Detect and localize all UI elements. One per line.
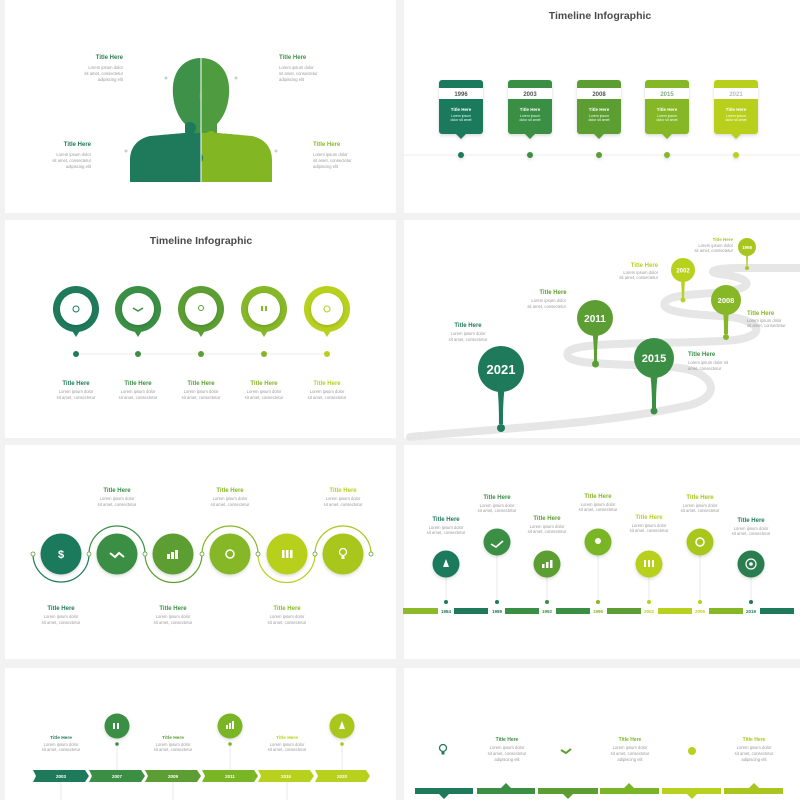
label 1998: Title Here	[713, 237, 733, 242]
label above 2: Title Here	[103, 488, 131, 494]
item 1996	[579, 494, 618, 604]
card 2021	[714, 80, 758, 158]
chevron bar: 2003	[56, 774, 67, 779]
label below 3: Title Here	[159, 606, 187, 612]
label above 6	[324, 488, 363, 507]
ring pin 5: Title Here	[313, 381, 341, 387]
label 2008	[747, 311, 786, 328]
callout bottom-left: sit amet, consectetur	[52, 158, 92, 163]
item 2002: Title Here	[635, 515, 663, 521]
text 2015: Title Here	[276, 735, 298, 741]
callout top-left: adipiscing elit	[98, 77, 124, 82]
label 2008: sit amet, consectetur	[747, 323, 786, 328]
card 1996: dolor sit amet	[450, 118, 472, 122]
card 2008	[577, 80, 621, 158]
callout bottom-right: Title Here	[313, 142, 341, 148]
label below 3: sit amet, consectetur	[154, 620, 193, 625]
item 2019: Title Here	[737, 518, 765, 524]
card 2015: Title Here	[657, 107, 678, 112]
label 2021: sit amet, consectetur	[449, 337, 488, 342]
card 2003: dolor sit amet	[519, 118, 541, 122]
ring pin 2: Lorem ipsum dolor	[121, 389, 156, 394]
pin 2021: 2021	[487, 362, 515, 377]
icon: head	[688, 747, 696, 755]
ring pin 4	[241, 286, 287, 400]
year bar: 2002	[644, 609, 655, 614]
label 2002: Title Here	[631, 263, 659, 269]
label 2021	[449, 323, 488, 342]
label above 4: sit amet, consectetur	[211, 502, 250, 507]
callout top-right: Lorem ipsum dolor	[279, 65, 314, 70]
ring pin 1: sit amet, consectetur	[57, 395, 96, 400]
circle 2	[96, 534, 138, 574]
label 2015: amet, consectetur	[688, 366, 722, 371]
heading: Timeline Infographic	[150, 235, 252, 247]
item 2006	[681, 495, 720, 604]
item 1992	[528, 516, 567, 604]
ring pin 5: sit amet, consectetur	[308, 395, 347, 400]
text 2003: sit amet, consectetur	[42, 747, 81, 752]
callout bottom-left: Title Here	[64, 142, 92, 148]
panel: wave circles timeline	[31, 488, 373, 625]
label below 5	[268, 606, 307, 625]
pin 2011: 2011	[584, 314, 606, 325]
pin 2015: 2015	[642, 353, 666, 365]
pin 2008: 2008	[718, 296, 734, 305]
label 2008: Lorem ipsum dolor	[747, 318, 782, 323]
segment bars	[415, 783, 783, 799]
text 2009: sit amet, consectetur	[154, 747, 193, 752]
callout bottom-left: adipiscing elit	[66, 164, 92, 169]
label 1998: sit amet, consectetur	[694, 248, 734, 253]
panel: card timeline	[404, 10, 800, 158]
card 2021: Title Here	[726, 107, 747, 112]
circle 6	[322, 534, 364, 574]
card 2015: dolor sit amet	[656, 118, 678, 122]
card 1996: Title Here	[451, 107, 472, 112]
ring pin 5	[304, 286, 350, 400]
label below 5: Title Here	[273, 606, 301, 612]
item 1989: Title Here	[483, 495, 511, 501]
label above 6: Lorem ipsum dolor	[326, 496, 361, 501]
item 1992: Lorem ipsum dolor	[530, 524, 565, 529]
item 2019: sit amet, consectetur	[732, 531, 771, 536]
text 2003	[42, 735, 81, 752]
year bar: 1989	[492, 609, 503, 614]
card 2015	[645, 80, 689, 158]
label below 1: Lorem ipsum dolor	[44, 614, 79, 619]
panel: ring pin timeline	[53, 235, 350, 400]
label 2008: Title Here	[747, 311, 775, 317]
label above 2	[98, 488, 137, 507]
item 1989	[478, 495, 517, 604]
year bar: 1996	[593, 609, 604, 614]
text 1: adipiscing elit	[494, 757, 520, 762]
label 2002	[619, 263, 659, 280]
label above 2: sit amet, consectetur	[98, 502, 137, 507]
ring pin 3	[178, 286, 224, 400]
pin 1998: 1998	[742, 245, 753, 250]
chevron bar	[33, 770, 370, 782]
text 2015: Lorem ipsum dolor	[270, 742, 305, 747]
circle 1: $	[58, 549, 64, 561]
chevron bar: 2009	[168, 774, 179, 779]
label below 5: sit amet, consectetur	[268, 620, 307, 625]
wave line	[31, 526, 373, 582]
item 2019	[732, 518, 771, 604]
ring pin 2: sit amet, consectetur	[119, 395, 158, 400]
icon: handshake	[561, 749, 571, 753]
panel: diamond bar timeline	[415, 737, 783, 799]
card 2008: Title Here	[589, 107, 610, 112]
callout bottom-right	[274, 142, 352, 169]
label below 1	[42, 606, 81, 625]
text 2015	[268, 735, 307, 752]
label above 2: Lorem ipsum dolor	[100, 496, 135, 501]
panel: staggered circles on bar	[403, 494, 794, 614]
year bar: 2019	[746, 609, 757, 614]
chevron bar: 2015	[281, 774, 292, 779]
label 2021: Title Here	[454, 323, 482, 329]
text 3: Lorem ipsum dolor	[737, 745, 772, 750]
label above 4: Lorem ipsum dolor	[213, 496, 248, 501]
pin 2002	[671, 258, 695, 302]
item 2002	[630, 515, 669, 604]
ring pin 5: Lorem ipsum dolor	[310, 389, 345, 394]
label above 6: sit amet, consectetur	[324, 502, 363, 507]
card 2003: Title Here	[520, 107, 541, 112]
ring pin 3: Title Here	[187, 381, 215, 387]
label 1998	[694, 237, 734, 253]
label below 3	[154, 606, 193, 625]
label 2021: Lorem ipsum dolor	[451, 331, 486, 336]
year bar	[403, 608, 794, 614]
pin 2015	[634, 338, 674, 414]
card 2008: 2008	[592, 92, 606, 98]
callout top-right: adipiscing elit	[279, 77, 305, 82]
card 2008: Lorem ipsum	[589, 114, 609, 118]
marker 2020	[330, 714, 354, 770]
text 2009: Lorem ipsum dolor	[156, 742, 191, 747]
callout top-right: Title Here	[279, 55, 307, 61]
year bar: 1992	[542, 609, 553, 614]
item 1984: sit amet, consectetur	[427, 530, 466, 535]
item 2006: sit amet, consectetur	[681, 508, 720, 513]
card 2021: dolor sit amet	[725, 118, 747, 122]
text 2009	[154, 735, 193, 752]
label above 4: Title Here	[216, 488, 244, 494]
callout top-left: Lorem ipsum dolor	[88, 65, 124, 70]
callout bottom-left	[52, 142, 128, 169]
text 2: Lorem ipsum dolor	[613, 745, 648, 750]
label below 1: sit amet, consectetur	[42, 620, 81, 625]
item 1984	[427, 517, 466, 604]
ring pin 1	[53, 286, 99, 400]
item 1984: Title Here	[432, 517, 460, 523]
card 1996: 1996	[454, 92, 468, 98]
item 2002: Lorem ipsum dolor	[632, 523, 667, 528]
pin 2002: 2002	[676, 268, 690, 274]
circle 1	[40, 534, 82, 574]
callout bottom-right: adipiscing elit	[313, 164, 339, 169]
label 2011: Title Here	[539, 290, 567, 296]
text 2009: Title Here	[162, 735, 184, 741]
item 1996: Title Here	[584, 494, 612, 500]
item 2006: Title Here	[686, 495, 714, 501]
item 1992: sit amet, consectetur	[528, 529, 567, 534]
label 2011	[527, 290, 567, 309]
ring pin 4: Title Here	[250, 381, 278, 387]
card 2021: 2021	[729, 92, 743, 98]
circle 4	[210, 534, 250, 574]
item 1996: Lorem ipsum dolor	[581, 502, 616, 507]
card 1996: Lorem ipsum	[451, 114, 471, 118]
label above 6: Title Here	[329, 488, 357, 494]
ring pin 1: Title Here	[62, 381, 90, 387]
marker 2007	[104, 714, 130, 770]
label 2011: sit amet, consectetur	[527, 304, 567, 309]
text 1: Title Here	[496, 737, 519, 743]
pin 2021	[478, 346, 524, 432]
marker 2011	[218, 714, 242, 770]
text 1: sit amet, consectetur	[488, 751, 527, 756]
card 2003	[508, 80, 552, 158]
pin 2011	[577, 300, 613, 368]
label 1998: Lorem ipsum dolor	[698, 243, 734, 248]
card 2003: Lorem ipsum	[520, 114, 540, 118]
label 2015	[688, 352, 729, 371]
label 2011: Lorem ipsum dolor	[531, 298, 567, 303]
callout top-left: sit amet, consectetur	[84, 71, 124, 76]
panel: winding road timeline	[410, 237, 800, 437]
heading: Timeline Infographic	[549, 10, 651, 22]
ring pin 3: sit amet, consectetur	[182, 395, 221, 400]
puzzle person silhouette	[130, 58, 272, 182]
text 2: sit amet, consectetur	[611, 751, 650, 756]
label below 5: Lorem ipsum dolor	[270, 614, 305, 619]
item 1996: sit amet, consectetur	[579, 507, 618, 512]
ring pin 1: Lorem ipsum dolor	[59, 389, 94, 394]
text 3: adipiscing elit	[741, 757, 767, 762]
callout bottom-left: Lorem ipsum dolor	[56, 152, 92, 157]
text 2: Title Here	[619, 737, 642, 743]
road	[410, 268, 800, 437]
panel: chevron timeline	[33, 714, 370, 800]
ring pin 4: Lorem ipsum dolor	[247, 389, 282, 394]
card 2015: 2015	[660, 92, 674, 98]
callout top-right	[234, 55, 318, 82]
text 2003: Title Here	[50, 735, 72, 741]
text 1	[488, 737, 527, 762]
item 2019: Lorem ipsum dolor	[734, 526, 769, 531]
ring pin 3: Lorem ipsum dolor	[184, 389, 219, 394]
circle 3	[152, 534, 194, 574]
circle 5	[266, 534, 308, 574]
item 1989: Lorem ipsum dolor	[480, 503, 515, 508]
ring pin 4: sit amet, consectetur	[245, 395, 284, 400]
pin 2008	[711, 285, 741, 340]
icon: bulb	[440, 744, 446, 754]
chevron bar: 2020	[337, 774, 348, 779]
panel: puzzle head	[52, 50, 352, 190]
callout bottom-right: sit amet, consectetur	[313, 158, 352, 163]
year bar: 1984	[441, 609, 452, 614]
chevron bar: 2011	[225, 774, 235, 779]
text 3: sit amet, consectetur	[735, 751, 774, 756]
label below 3: Lorem ipsum dolor	[156, 614, 191, 619]
label above 4	[211, 488, 250, 507]
callout top-left: Title Here	[96, 55, 124, 61]
callout top-left	[84, 55, 168, 82]
text 3: Title Here	[743, 737, 766, 743]
item 1992: Title Here	[533, 516, 561, 522]
item 2006: Lorem ipsum dolor	[683, 503, 718, 508]
label 2002: Lorem ipsum dolor	[623, 270, 659, 275]
item 2002: sit amet, consectetur	[630, 528, 669, 533]
text 2	[611, 737, 650, 762]
card 2008: dolor sit amet	[588, 118, 610, 122]
item 1989: sit amet, consectetur	[478, 508, 517, 513]
year bar: 2006	[695, 609, 706, 614]
callout top-right: sit amet, consectetur	[279, 71, 318, 76]
card 2015: Lorem ipsum	[657, 114, 677, 118]
item 1984: Lorem ipsum dolor	[429, 525, 464, 530]
label 2015: Title Here	[688, 352, 716, 358]
text 1: Lorem ipsum dolor	[490, 745, 525, 750]
card 1996	[439, 80, 483, 158]
pin 1998	[738, 238, 756, 270]
ring pin 2	[115, 286, 161, 400]
card 2021: Lorem ipsum	[726, 114, 746, 118]
text 2015: sit amet, consectetur	[268, 747, 307, 752]
text 2003: Lorem ipsum dolor	[44, 742, 79, 747]
ring pin 2: Title Here	[124, 381, 152, 387]
label 2015: Lorem ipsum dolor sit	[688, 360, 729, 365]
text 3	[735, 737, 774, 762]
chevron bar: 2007	[112, 774, 123, 779]
card 2003: 2003	[523, 92, 537, 98]
label below 1: Title Here	[47, 606, 75, 612]
callout bottom-right: Lorem ipsum dolor	[313, 152, 348, 157]
label 2002: sit amet, consectetur	[619, 275, 659, 280]
text 2: adipiscing elit	[617, 757, 643, 762]
